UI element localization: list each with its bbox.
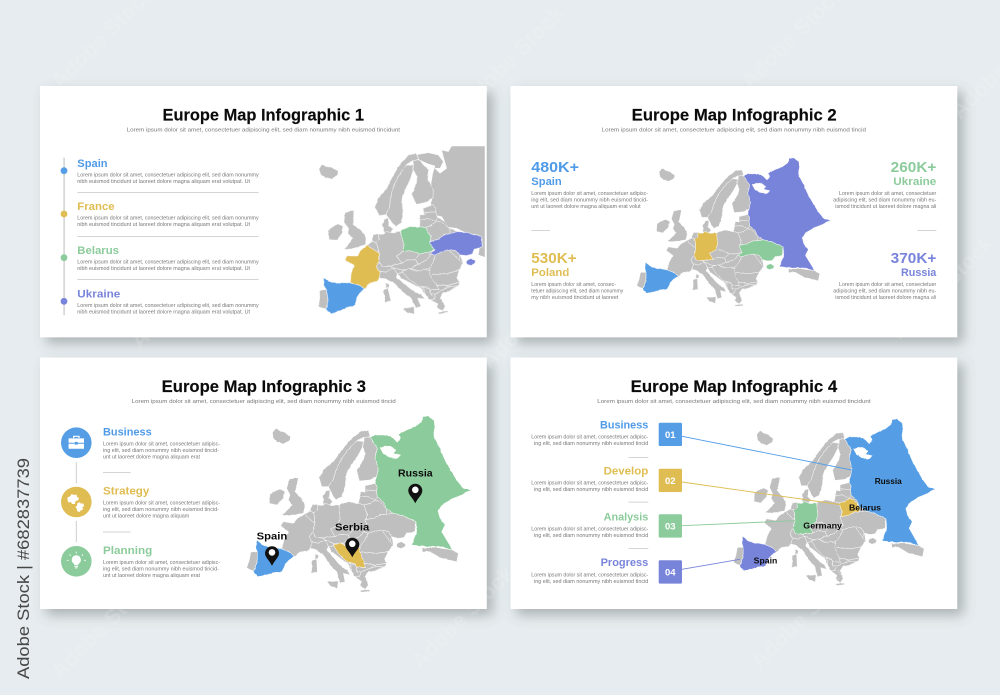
panel: Europe Map Infographic 4: [510, 358, 957, 609]
map 3: Europe with Russia, Serbia, Spain highlighted: [247, 416, 471, 592]
item 03: Analysis: Analysis: [604, 511, 648, 523]
item: Business: Business: [103, 426, 152, 438]
item: Strategy: Strategy: [103, 486, 150, 498]
icon: light bulb: [61, 546, 92, 577]
item: Planning: ing elit, sed diam nonummy nibh euismod tincid-: [103, 566, 219, 572]
stat: 370K+ Russia: Lorem ipsum dolor sit amet, consectetuer: [839, 282, 937, 288]
timeline line: [63, 158, 65, 315]
item 01: Business: ing elit, sed diam nonummy nibh euismod tincid: [534, 441, 648, 447]
item: France: Lorem ipsum dolor sit amet, consectetuer adipiscing elit, sed diam nonummy: [77, 216, 259, 222]
item 02: Develop: 02: [665, 476, 676, 487]
panel: Europe Map Infographic 2: [510, 86, 957, 337]
pin: Russia: [398, 468, 433, 503]
stock watermarks: Adobe Stock: [406, 560, 519, 674]
stat: 260K+ Ukraine: 260K+: [891, 160, 936, 176]
map labels: [754, 476, 902, 565]
stat: 530K+ Poland: Poland: [531, 267, 569, 279]
item: Ukraine: [61, 288, 259, 316]
item 03: Analysis: Lorem ipsum dolor sit amet, consectetuer adipisc-: [531, 526, 649, 532]
divider: [629, 547, 648, 550]
stock credit vertical text: Adobe Stock | #682837739: [14, 458, 33, 679]
item: Business: ing elit, sed diam nonummy nibh euismod tincid-: [103, 448, 219, 454]
item 04: Progress: ing elit, sed diam nonummy nibh euismod tincid: [534, 579, 648, 585]
item: Spain: Lorem ipsum dolor sit amet, consectetuer adipiscing elit, sed diam nonummy: [77, 172, 259, 178]
stat: 480K+ Spain: 480K+: [531, 160, 579, 176]
item 02: Develop: Lorem ipsum dolor sit amet, consectetuer adipisc-: [531, 480, 649, 486]
stock watermarks: Adobe Stock: [886, 230, 999, 344]
card 1 background: [40, 86, 487, 337]
item 01: Business: Lorem ipsum dolor sit amet, consectetuer adipisc-: [531, 434, 649, 440]
item: Ukraine: nibh euismod tincidunt ut laoreet dolore magna aliquam erat volutpat. Ut: [77, 310, 251, 316]
subtitle 1: Lorem ipsum dolor sit amet, consectetuer adipiscing elit, sed diam nonummy nibh euismod tincidunt: [127, 128, 401, 134]
item: France: France: [77, 201, 115, 213]
map labels: Belarus: [849, 502, 881, 512]
map labels: Russia: [875, 476, 902, 486]
item: Spain: nibh euismod tincidunt ut laoreet dolore magna aliquam erat volutpat. Ut: [77, 179, 251, 185]
item: Belarus: nibh euismod tincidunt ut laoreet dolore magna aliquam erat volutpat. Ut: [77, 266, 251, 272]
stat: 260K+ Ukraine: Ukraine: [893, 176, 936, 188]
map 1: Europe with Spain, France, Poland, Ukraine highlighted: [318, 146, 485, 314]
divider: [629, 456, 648, 459]
item: Planning: Lorem ipsum dolor sit amet, consectetuer adipisc-: [103, 560, 220, 566]
divider: [103, 471, 131, 474]
map 2: Europe with Russia, Germany, Ukraine, Spain highlighted: [637, 158, 831, 306]
stat: 260K+ Ukraine: ismod tincidunt ut laoreet dolore magna ali: [835, 204, 936, 210]
right divider: [917, 229, 936, 232]
stat: 370K+ Russia: [833, 251, 937, 301]
stat: 480K+ Spain: ing elit, sed diam nonummy nibh euismod tincid-: [531, 198, 648, 204]
item: Business: unt ut laoreet dolore magna aliquam erat: [103, 454, 201, 460]
item 04: Progress: [531, 557, 740, 585]
stock watermarks: Adobe Stock: [746, 560, 859, 674]
panel: Europe Map Infographic 1: [40, 86, 538, 337]
card 3 background: [40, 358, 487, 609]
item 04: Progress: 04: [665, 568, 676, 578]
pin: Serbia: [335, 522, 369, 557]
subtitle 4: Lorem ipsum dolor sit amet, consectetuer adipiscing elit, sed diam nonummy nibh euismod tincidunt: [597, 399, 871, 405]
item: Spain: Spain: [77, 158, 108, 170]
item: Strategy: Lorem ipsum dolor sit amet, consectetuer adipisc-: [103, 500, 220, 506]
item 01: Business: Business: [600, 420, 648, 432]
stat: 480K+ Spain: Spain: [531, 176, 562, 188]
subtitle 2: Lorem ipsum dolor sit amet, consectetuer adipiscing elit, sed diam nonummy nibh euismod tincid: [602, 128, 866, 134]
map 4: Europe with Russia, Belarus, Germany, Spain highlighted: [734, 419, 936, 585]
icon: briefcase: [61, 427, 92, 458]
item: Planning: unt ut laoreet dolore magna aliquam erat: [103, 573, 201, 579]
stock watermarks: Adobe Stock: [46, 570, 159, 684]
pin: Spain: [257, 530, 287, 566]
item: Ukraine: Lorem ipsum dolor sit amet, consectetuer adipiscing elit, sed diam nonummy: [77, 303, 259, 309]
title 3: Europe Map Infographic 3: [162, 378, 366, 396]
stock watermarks: Adobe Stock: [456, 0, 569, 114]
item 02: Develop: [531, 466, 843, 505]
item 01: Business: [531, 420, 852, 470]
item: Strategy: [61, 486, 220, 520]
item: Strategy: ing elit, sed diam nonummy nibh euismod tincid-: [103, 507, 219, 513]
item: Planning: [61, 545, 220, 579]
map labels: Spain: [754, 555, 777, 565]
title 4: Europe Map Infographic 4: [631, 378, 838, 396]
divider: [103, 531, 131, 533]
map labels: Germany: [803, 520, 842, 530]
stat: 530K+ Poland: Lorem ipsum dolor sit amet, consec-: [531, 282, 616, 288]
stat: 260K+ Ukraine: adipiscing elit, sed diam nonummy nibh eu-: [833, 198, 937, 204]
left divider: [531, 229, 550, 232]
item: Belarus: [61, 245, 259, 280]
stat: 480K+ Spain: Lorem ipsum dolor sit amet, consectetuer adipisc-: [531, 191, 648, 197]
item 01: Business: 01: [665, 430, 676, 441]
item 03: Analysis: ing elit, sed diam nonummy nibh euismod tincid: [534, 533, 648, 539]
item 04: Progress: Progress: [601, 557, 648, 569]
item: France: [61, 201, 259, 237]
stock watermarks: Adobe Stock: [126, 240, 239, 354]
item: Planning: Planning: [103, 545, 152, 557]
item 03: Analysis: [531, 511, 795, 539]
stat: 370K+ Russia: adipiscing elit, sed diam nonummy nibh eu-: [833, 288, 937, 294]
stat: 480K+ Spain: unt ut laoreet dolore magna aliquam erat volut: [531, 204, 641, 210]
item 03: Analysis: 03: [665, 522, 676, 532]
item: France: nibh euismod tincidunt ut laoreet dolore magna aliquam erat volutpat. Ut: [77, 222, 251, 228]
stock watermarks: Adobe Stock: [476, 260, 589, 374]
item 02: Develop: ing elit, sed diam nonummy nibh euismod tincid: [534, 487, 648, 493]
stat: 370K+ Russia: 370K+: [891, 251, 936, 267]
item: Business: Lorem ipsum dolor sit amet, consectetuer adipisc-: [103, 441, 220, 447]
stat: 260K+ Ukraine: Lorem ipsum dolor sit amet, consectetuer: [839, 191, 937, 197]
stat: 530K+ Poland: my nibh euismod tincidunt ut laoreet: [531, 295, 619, 301]
card 4 background: [510, 358, 957, 609]
stat: 530K+ Poland: [531, 251, 624, 301]
pin: Spain: Spain: [257, 530, 287, 542]
card 2 background: [510, 86, 957, 337]
stat: 370K+ Russia: ismod tincidunt ut laoreet dolore magna ali: [835, 295, 936, 301]
title 2: Europe Map Infographic 2: [632, 106, 837, 124]
item: Spain: [61, 158, 259, 193]
item: Belarus: Belarus: [77, 245, 119, 257]
connector lines: [75, 462, 77, 542]
stat: 530K+ Poland: tetuer adipiscing elit, sed diam nonummy: [531, 288, 624, 294]
divider: [629, 501, 648, 504]
item: Belarus: Lorem ipsum dolor sit amet, consectetuer adipiscing elit, sed diam nonummy: [77, 259, 259, 265]
pin: Serbia: Serbia: [335, 522, 369, 534]
item: Business: [61, 426, 220, 460]
subtitle 3: Lorem ipsum dolor sit amet, consectetuer adipiscing elit, sed diam nonummy nibh euismod tincid: [132, 399, 396, 405]
stat: 260K+ Ukraine: [833, 160, 937, 210]
icon: puzzle: [61, 487, 92, 517]
stat: 370K+ Russia: Russia: [901, 267, 937, 279]
pin: Russia: Russia: [398, 468, 433, 480]
item: Strategy: unt ut laoreet dolore magna aliquam: [103, 514, 189, 520]
stat: 530K+ Poland: 530K+: [531, 251, 577, 267]
title 1: Europe Map Infographic 1: [162, 106, 364, 124]
item 02: Develop: Develop: [604, 466, 649, 478]
panel: Europe Map Infographic 3: [40, 358, 487, 609]
item: Ukraine: Ukraine: [77, 288, 120, 300]
item 04: Progress: Lorem ipsum dolor sit amet, consectetuer adipisc-: [531, 572, 649, 578]
stat: 480K+ Spain: [531, 160, 648, 210]
